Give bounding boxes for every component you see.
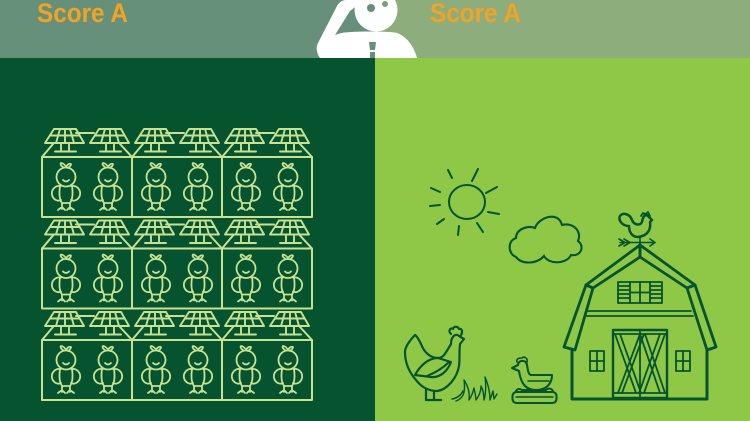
chicken house row 2 col 2: [132, 220, 222, 308]
chicken house row 1 col 3: [222, 129, 312, 217]
chicken house row 3 col 1: [42, 312, 132, 400]
chicken house row 1 col 1: [42, 129, 132, 217]
chicken house row 3 col 2: [132, 312, 222, 400]
barn side windows: [590, 351, 690, 371]
top band right: [375, 0, 750, 58]
icon: large hen: [405, 327, 464, 400]
barn roof: [564, 245, 716, 350]
icon: sun: [430, 169, 499, 235]
barn loft window: [618, 282, 662, 303]
icon: barn: [564, 212, 716, 399]
barn door: [613, 330, 667, 398]
chicken house row 2 col 1: [42, 220, 132, 308]
weathervane: [619, 212, 655, 247]
top band left: [0, 0, 375, 58]
barn walls: [572, 245, 707, 399]
barn belt: [585, 311, 693, 316]
panel: dark green: [0, 58, 375, 421]
chicken house row 2 col 3: [222, 220, 312, 308]
icon: grass: [452, 377, 497, 401]
chicken house grid: [42, 129, 312, 400]
chicken house row 1 col 2: [132, 129, 222, 217]
icon: hen on nest: [512, 357, 556, 403]
icon: cloud: [510, 217, 582, 263]
panel: light green: [375, 58, 750, 421]
icon: thinking person: [317, 0, 417, 58]
chicken house row 3 col 3: [222, 312, 312, 400]
